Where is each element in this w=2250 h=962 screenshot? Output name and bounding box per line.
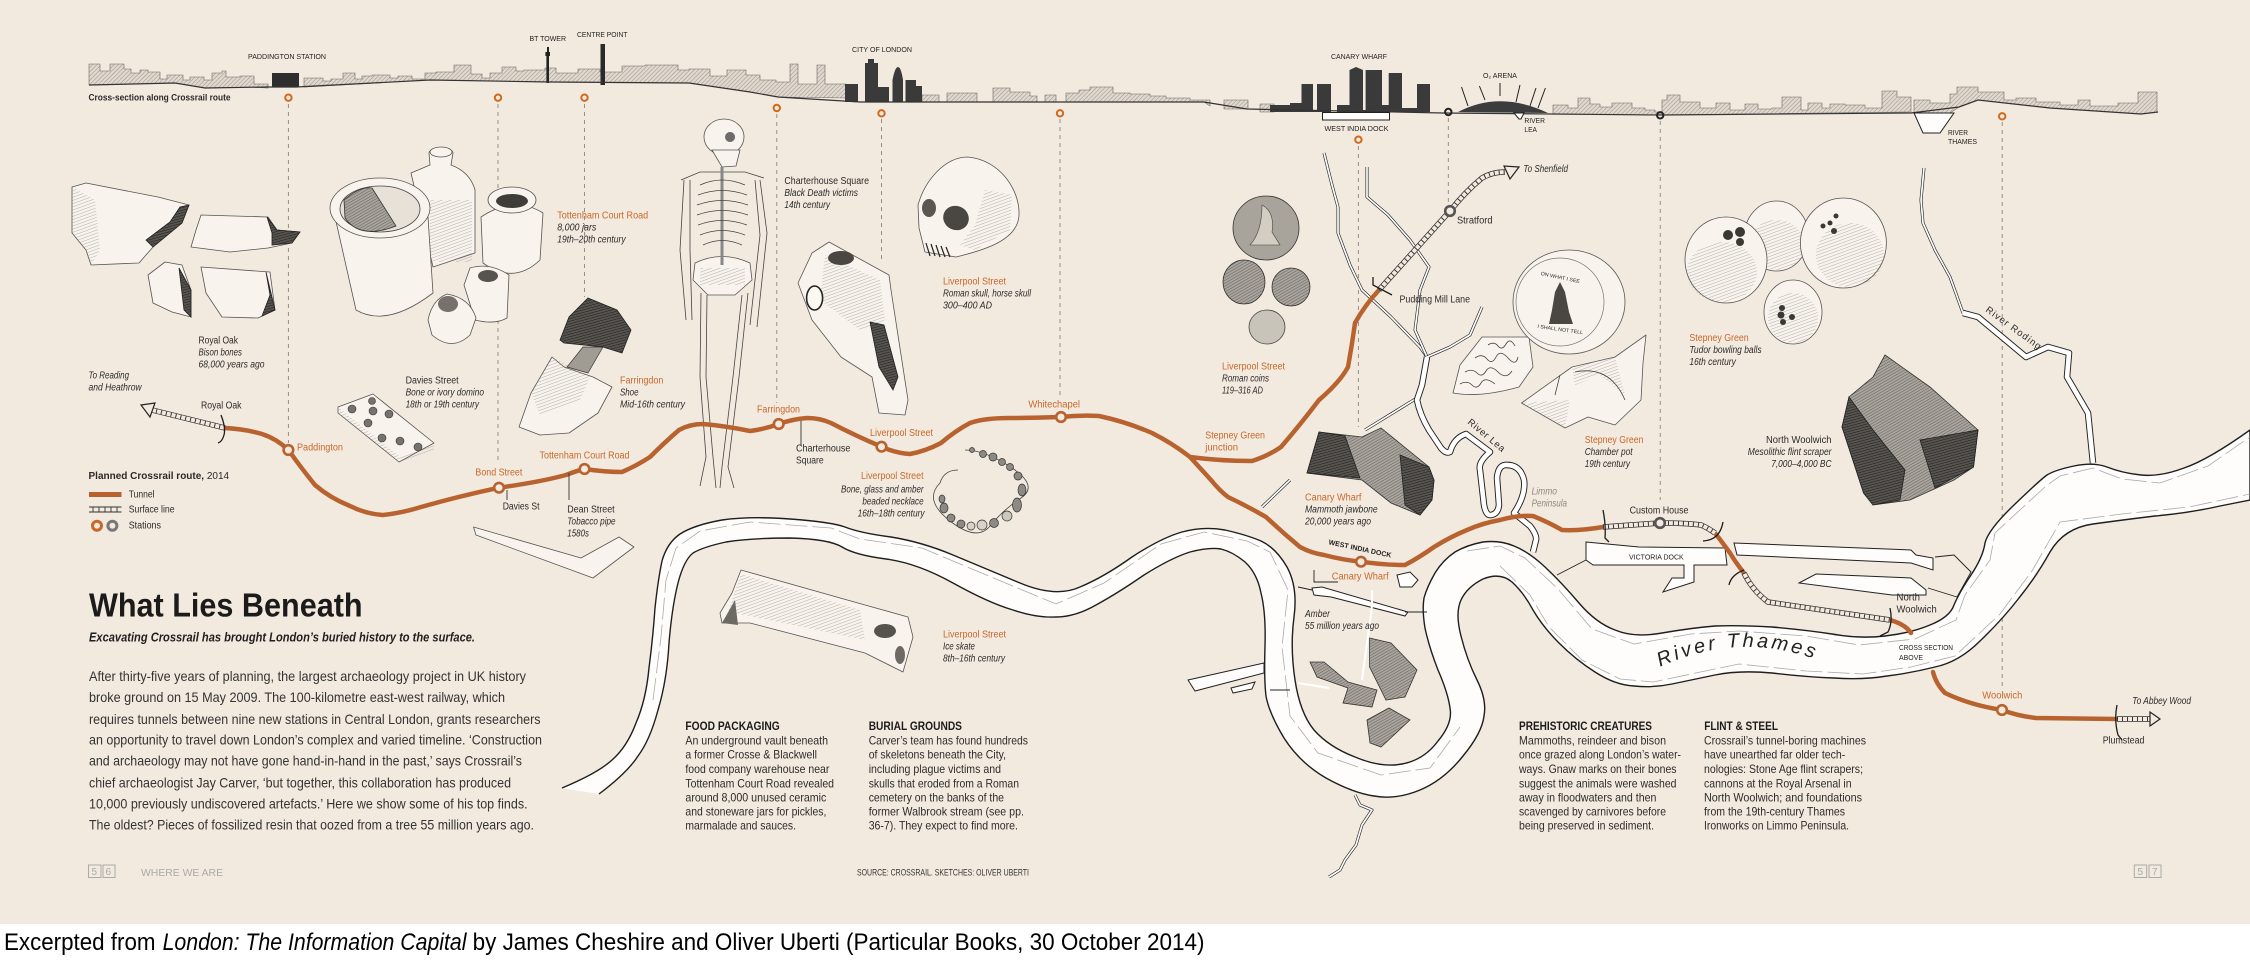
- caption: ice skate: Liverpool Street: [943, 629, 1006, 640]
- caption: Farringdon: Mid-16th century: [620, 400, 686, 411]
- cross-section labels: RIVER: [1524, 118, 1545, 125]
- text block: Flint and Steel: from the 19th-century Thames: [1704, 805, 1845, 819]
- station markers on cross-section: [285, 94, 2005, 143]
- page number left: [88, 865, 223, 879]
- cross-section labels: Cross-section along Crossrail route: [88, 92, 230, 104]
- legend: surface line: [89, 504, 175, 515]
- caption: bowling balls: Tudor bowling balls: [1689, 345, 1762, 356]
- intro text block: requires tunnels between nine new stations in Central London, grants researchers: [89, 711, 540, 727]
- icon: beaded necklace: [933, 448, 1028, 533]
- legend: stations: Stations: [129, 520, 161, 531]
- caption: amber: 55 million years ago: [1305, 621, 1379, 632]
- caption: chamber pot: [1585, 435, 1644, 470]
- cross-section labels: O₂ ARENA: [1483, 73, 1517, 80]
- route labels: Custom House: [1630, 505, 1689, 516]
- map labels: rivers: [1465, 305, 2044, 666]
- caption: Farringdon: Farringdon: [620, 376, 663, 387]
- legend: planned Crossrail route: Planned Crossrail route, 2014: [88, 471, 230, 482]
- caption: chamber pot: Stepney Green: [1585, 435, 1644, 446]
- arrow: to Reading and Heathrow: [141, 403, 155, 417]
- text block: Prehistoric Creatures: being preserved in sediment.: [1519, 818, 1654, 832]
- route: surface sections: [141, 166, 2160, 740]
- caption: Liverpool Street skulls: Roman skull, horse skull: [943, 289, 1032, 300]
- caption: North Woolwich: [1748, 435, 1832, 470]
- text block: Flint and Steel: cannons at the Royal Arsenal in: [1704, 776, 1852, 790]
- caption: North Woolwich: 7,000–4,000 BC: [1771, 459, 1832, 470]
- icon: handwritten shard: [1453, 337, 1533, 395]
- caption: Roman coins: Liverpool Street: [1222, 361, 1285, 372]
- footer strip: [0, 924, 2250, 962]
- icon: coins: [1223, 196, 1310, 344]
- icon: chamber pot base: I SHALL NOT TELL: [1537, 324, 1584, 336]
- panel: Liverpool Street skulls: [798, 157, 1032, 415]
- panel: Davies Street domino: [338, 376, 484, 462]
- panel: Farringdon shoe: [519, 298, 686, 435]
- legend: planned Crossrail route: [88, 471, 230, 531]
- arrow: to Abbey Wood: [2150, 712, 2160, 726]
- icon: Paddington station silhouette: [272, 73, 299, 87]
- caption: necklace: 16th–18th century: [858, 509, 925, 520]
- text block: Burial Grounds: BURIAL GROUNDS: [869, 721, 962, 733]
- ground line: [89, 80, 2158, 115]
- caption: necklace: [841, 471, 925, 520]
- route labels: Royal Oak: [201, 400, 242, 411]
- subtitle: Excavating Crossrail has brought London’s buried history to the surface.: [89, 630, 475, 645]
- map labels: rivers: River Lea: [1465, 417, 1508, 455]
- intro text block: an opportunity to travel down London’s complex and varied timeline. ‘Construction: [89, 732, 542, 748]
- title: What Lies Beneath: [89, 587, 363, 624]
- text block: Food Packaging: Tottenham Court Road revealed: [685, 776, 834, 790]
- caption: chamber pot: Chamber pot: [1585, 447, 1634, 458]
- text block: Flint and Steel: Ironworks on Limmo Peninsula.: [1704, 818, 1849, 832]
- river notches in section: [1322, 112, 1954, 133]
- text block: Prehistoric Creatures: [1518, 721, 1681, 832]
- caption: ice skate: Ice skate: [943, 641, 975, 652]
- caption: bowling balls: Stepney Green: [1689, 333, 1749, 344]
- intro text block: chief archaeologist Jay Carver, ‘but together, this collaboration has produced: [89, 775, 511, 791]
- text block: Food Packaging: marmalade and sauces.: [685, 818, 796, 832]
- panel: Tottenham Court Road jars: [330, 147, 648, 344]
- text block: Flint and Steel: nologies: Stone Age flint scrapers;: [1704, 762, 1863, 776]
- icon: bowling balls: [1685, 198, 1886, 344]
- page number right: [2134, 865, 2161, 878]
- caption: Royal Oak: 68,000 years ago: [198, 360, 265, 371]
- cross-section labels: LEA: [1524, 127, 1537, 134]
- caption: Charterhouse Square: Charterhouse Square: [784, 176, 869, 187]
- page number left: WHERE WE ARE: [141, 867, 223, 879]
- page number left: 6: [106, 867, 112, 878]
- map labels: rivers: River Thames: [1658, 632, 1816, 666]
- caption: Royal Oak: Bison bones: [198, 348, 242, 359]
- route labels: Woolwich: [1896, 604, 1937, 615]
- icon: domino: [338, 394, 434, 462]
- route labels: [88, 164, 2191, 747]
- text block: Prehistoric Creatures: scavenged by carnivores before: [1519, 805, 1666, 819]
- legend: surface line: Surface line: [129, 504, 175, 515]
- icon: chamber pot base: ON WHAT I SEE: [1540, 271, 1581, 285]
- route labels: Liverpool Street: [870, 428, 933, 439]
- text block: Prehistoric Creatures: Mammoths, reindeer and bison: [1519, 733, 1666, 747]
- caption: Dean Street: 1580s: [567, 528, 589, 539]
- route labels: Square: [796, 456, 824, 467]
- text block: Prehistoric Creatures: away in floodwaters and then: [1519, 791, 1656, 805]
- cross-section labels: BT TOWER: [530, 36, 566, 43]
- text block: Flint and Steel: have unearthed far older tech-: [1704, 748, 1845, 762]
- caption: Dean Street: Tobacco pipe: [567, 516, 616, 527]
- caption: Roman coins: 119–316 AD: [1222, 385, 1263, 396]
- caption: Dean Street: [567, 504, 616, 539]
- caption: Davies Street: Bone or ivory domino: [406, 388, 484, 399]
- panel: Liverpool Street Roman coins: [1222, 196, 1310, 396]
- icon: chamber pot shards: [1522, 335, 1646, 428]
- page number left: 5: [92, 867, 98, 878]
- route labels: Stratford: [1457, 215, 1492, 226]
- panel: Charterhouse Square skeleton: [680, 119, 869, 488]
- legend: tunnel: Tunnel: [129, 489, 154, 500]
- caption: mammoth jawbone: [1304, 493, 1378, 528]
- route labels: To Reading: [88, 370, 129, 381]
- intro text block: 10,000 previously undiscovered artefacts.’ Here we show some of his top finds.: [89, 795, 528, 811]
- text block: Burial Grounds: skulls that eroded from a Roman: [869, 776, 1019, 790]
- text block: Prehistoric Creatures: suggest the animals were washed: [1519, 776, 1676, 790]
- icon: stoneware jars: [330, 147, 543, 344]
- text block: Burial Grounds: including plague victims and: [869, 762, 1001, 776]
- icon: City of London towers: [845, 59, 922, 102]
- caption: Davies Street: [406, 376, 484, 411]
- route labels: To Abbey Wood: [2132, 696, 2191, 707]
- icon: ice skate: [720, 570, 913, 672]
- text block: Burial Grounds: 36-7). They expect to find more.: [869, 818, 1018, 832]
- caption: necklace: beaded necklace: [862, 497, 924, 508]
- legend: stations: [92, 520, 161, 531]
- route: planned Crossrail tunnel: [225, 290, 2117, 719]
- page number right: 5: [2138, 867, 2144, 878]
- intro text block: The oldest? Pieces of fossilized resin that oozed from a tree 55 million years ago.: [89, 817, 534, 833]
- footer credit: by James Cheshire and Oliver Uberti (Particular Books, 30 October 2014): [473, 929, 1205, 956]
- route labels: WEST INDIA DOCK: [1328, 539, 1392, 560]
- intro text block: broke ground on 15 May 2009. The 100-kilometre east-west railway, which: [89, 689, 505, 705]
- route labels: Plumstead: [2103, 736, 2144, 747]
- caption: Davies Street: 18th or 19th century: [406, 400, 480, 411]
- text block: Flint and Steel: FLINT & STEEL: [1704, 721, 1778, 733]
- icon: Centre Point: [600, 44, 605, 85]
- text block: Prehistoric Creatures: ways. Gnaw marks on their bones: [1518, 762, 1676, 776]
- caption: North Woolwich: North Woolwich: [1766, 435, 1832, 446]
- icon: tobacco pipe: [474, 527, 634, 578]
- source credit: SOURCE: CROSSRAIL. SKETCHES: OLIVER UBERTI: [857, 868, 1029, 878]
- cross-section labels: WEST INDIA DOCK: [1324, 126, 1389, 133]
- arrow: to Shenfield: [1504, 166, 1519, 179]
- route labels: junction: [1204, 442, 1238, 453]
- text block: Food Packaging: [685, 721, 834, 832]
- caption: necklace: Liverpool Street: [861, 471, 924, 482]
- intro text block: and archaeology may not have gone hand-in-hand in the past,’ says Crossrail’s: [89, 753, 522, 769]
- caption: Roman coins: Roman coins: [1222, 373, 1269, 384]
- caption: Liverpool Street skulls: 300–400 AD: [943, 301, 992, 312]
- icon: horse skull: [798, 242, 908, 415]
- text block: Flint and Steel: North Woolwich; and foundations: [1704, 791, 1862, 805]
- panel: Royal Oak bison bones: [72, 183, 300, 371]
- route labels: Davies St: [503, 502, 540, 513]
- route labels: Charterhouse: [796, 444, 851, 455]
- intro text block: After thirty-five years of planning, the largest archaeology project in UK history: [89, 668, 526, 684]
- cross-section labels: CITY OF LONDON: [852, 47, 912, 54]
- cross-section labels: [88, 32, 1977, 146]
- caption: Liverpool Street skulls: Liverpool Street: [943, 277, 1006, 288]
- caption: Tottenham Court Road: [557, 210, 648, 246]
- icon: flint scraper: [1842, 355, 1978, 505]
- route labels: VICTORIA DOCK: [1629, 554, 1684, 561]
- chart: skyline cross-section: [89, 44, 2158, 133]
- text block: Food Packaging: around 8,000 unused ceramic: [685, 791, 826, 805]
- caption: Royal Oak: Royal Oak: [198, 336, 239, 347]
- caption: mammoth jawbone: Mammoth jawbone: [1305, 505, 1378, 516]
- map: River Roding: [1921, 168, 2093, 463]
- panel: Stepney Green bowling balls: [1685, 198, 1886, 368]
- cross-section labels: THAMES: [1948, 139, 1977, 146]
- caption: amber: [1304, 609, 1379, 632]
- caption: ice skate: [943, 629, 1006, 664]
- caption: mammoth jawbone: 20,000 years ago: [1304, 517, 1371, 528]
- panel: Canary Wharf amber: [1304, 609, 1417, 747]
- caption: bowling balls: 16th century: [1689, 357, 1737, 368]
- text block: Flint and Steel: Crossrail’s tunnel-boring machines: [1704, 733, 1866, 747]
- caption: Roman coins: [1222, 361, 1285, 396]
- route labels: Farringdon: [757, 405, 800, 416]
- caption: Tottenham Court Road: Tottenham Court Road: [557, 210, 648, 222]
- caption: Farringdon: [620, 376, 686, 411]
- caption: Davies Street: Davies Street: [406, 376, 459, 387]
- caption: mammoth jawbone: Canary Wharf: [1305, 493, 1362, 504]
- footer credit: [4, 929, 1204, 956]
- icon: BT Tower: [545, 47, 550, 83]
- icon: human skull: [918, 157, 1019, 257]
- text block: Food Packaging: An underground vault beneath: [685, 733, 828, 747]
- cross-section labels: CENTRE POINT: [577, 32, 628, 39]
- caption: Charterhouse Square: 14th century: [784, 200, 831, 211]
- icon: Canary Wharf towers: [1270, 67, 1430, 112]
- route labels: Tottenham Court Road: [540, 451, 630, 462]
- legend: tunnel: [89, 489, 154, 500]
- panel: Liverpool Street necklace: [841, 448, 1028, 533]
- caption: amber: Amber: [1304, 609, 1331, 620]
- route labels: Stepney Green: [1205, 430, 1265, 441]
- cross-section labels: PADDINGTON STATION: [248, 54, 326, 61]
- caption: Royal Oak: [198, 336, 265, 371]
- route labels: Woolwich: [1982, 691, 2022, 702]
- caption: chamber pot: 19th century: [1585, 459, 1631, 470]
- route stations: [284, 206, 2007, 715]
- icon: mammoth jawbone: [1307, 428, 1434, 515]
- drop lines from cross-section to route: [288, 104, 2002, 690]
- text block: Food Packaging: food company warehouse near: [685, 762, 829, 776]
- text block: Food Packaging: and stoneware jars for pickles,: [685, 805, 826, 819]
- panel: North Woolwich flint scraper: [1748, 355, 1978, 505]
- text block: Burial Grounds: Carver’s team has found hundreds: [869, 733, 1028, 747]
- caption: Tottenham Court Road: 8,000 jars: [557, 223, 596, 234]
- caption: Tottenham Court Road: 19th–20th century: [557, 235, 626, 246]
- cross-section labels: CANARY WHARF: [1331, 54, 1387, 61]
- cross-section labels: RIVER: [1948, 130, 1968, 137]
- route labels: To Shenfield: [1523, 164, 1568, 175]
- route labels: Paddington: [297, 442, 343, 453]
- intro text block: [89, 668, 542, 833]
- caption: Charterhouse Square: Black Death victims: [784, 188, 858, 199]
- caption: Farringdon: Shoe: [620, 388, 639, 399]
- icon: shoe: [519, 298, 631, 435]
- text block: Food Packaging: FOOD PACKAGING: [685, 721, 780, 733]
- route labels: and Heathrow: [88, 382, 142, 393]
- text block: Food Packaging: a former Crosse & Blackwell: [685, 748, 817, 762]
- map: River Lea and tributaries: [1262, 153, 1536, 877]
- panel: Canary Wharf mammoth jawbone: [1304, 428, 1434, 528]
- text block: Flint and Steel: [1704, 721, 1866, 832]
- caption: ice skate: 8th–16th century: [943, 653, 1006, 664]
- caption: Liverpool Street skulls: [943, 277, 1032, 312]
- route labels: North: [1896, 592, 1920, 603]
- map labels: rivers: Peninsula: [1532, 499, 1567, 510]
- route labels: ABOVE: [1899, 655, 1923, 662]
- route labels: Whitechapel: [1028, 399, 1080, 410]
- text block: Burial Grounds: former Walbrook stream (see pp.: [869, 805, 1024, 819]
- footer credit: Excerpted from: [4, 929, 156, 956]
- text block: Burial Grounds: of skeletons beneath the City,: [869, 748, 1006, 762]
- caption: bowling balls: [1689, 333, 1762, 368]
- icon: chamber pot base: [1513, 250, 1625, 354]
- panel: Dean Street tobacco pipe: [474, 504, 634, 578]
- portal brackets: [218, 277, 2122, 740]
- icon: bison bones: [72, 183, 300, 318]
- panel: Liverpool Street ice skate: [720, 570, 1006, 672]
- caption: necklace: Bone, glass and amber: [841, 485, 924, 496]
- text block: Burial Grounds: cemetery on the banks of the: [869, 791, 1004, 805]
- icon: skeleton: [680, 119, 767, 488]
- text block: Prehistoric Creatures: once grazed along London’s water-: [1519, 748, 1681, 762]
- route labels: Pudding Mill Lane: [1400, 294, 1470, 305]
- map labels: rivers: Limmo: [1532, 487, 1557, 498]
- map labels: rivers: River Roding: [1983, 305, 2044, 353]
- route labels: Canary Wharf: [1332, 571, 1389, 582]
- caption: Charterhouse Square: [784, 176, 869, 211]
- text block: Burial Grounds: [869, 721, 1028, 832]
- map: docks: [1188, 542, 1971, 693]
- panel: Stepney Green chamber pot: [1453, 250, 1646, 470]
- page number right: 7: [2152, 867, 2158, 878]
- footer credit: London: The Information Capital: [163, 929, 467, 956]
- caption: Dean Street: Dean Street: [567, 504, 615, 515]
- map: River Thames: [562, 430, 2250, 797]
- icon: O2 Arena: [1458, 83, 1548, 113]
- text block: Prehistoric Creatures: PREHISTORIC CREATURES: [1519, 721, 1652, 733]
- route labels: Bond Street: [475, 468, 522, 479]
- caption: North Woolwich: Mesolithic flint scraper: [1748, 447, 1832, 458]
- icon: amber pieces: [1310, 638, 1417, 747]
- route labels: CROSS SECTION: [1899, 645, 1953, 652]
